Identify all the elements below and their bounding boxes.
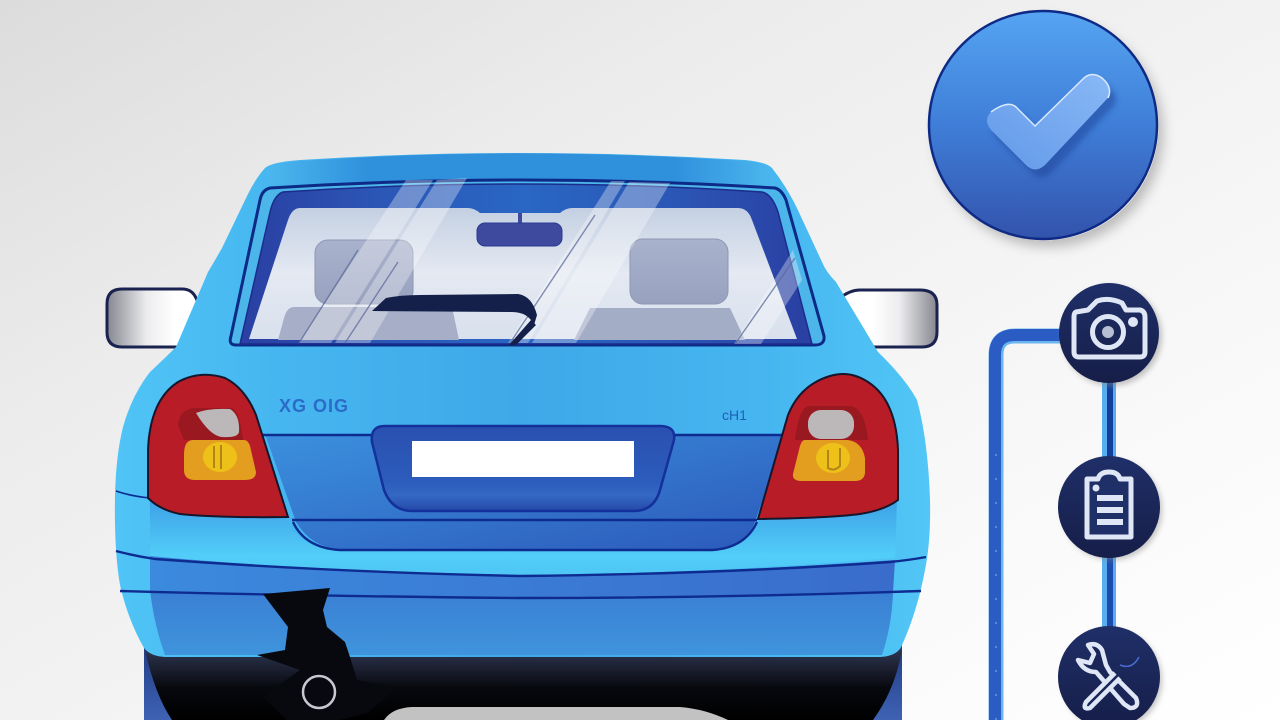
wiper [372,294,537,325]
icon: clipboard node [1058,456,1162,560]
mirror stem [518,213,522,224]
left tail light [148,375,288,517]
bumper lower panel [150,590,893,655]
check mark shadow [993,82,1116,178]
bumper crease lines [116,491,926,598]
car illustration [107,153,937,720]
check mark [987,74,1110,170]
check badge [929,11,1163,247]
trim label: cH1 [722,407,747,423]
lower bumper valance [144,640,902,720]
right seat back [574,308,745,340]
right tail light [758,374,898,519]
exhaust and damage shape [257,588,397,720]
process connector: left rail [995,335,1062,720]
reflection edge lines [299,215,795,344]
trunk lid [265,434,785,549]
left amber lamp [184,440,256,480]
left side mirror [107,289,220,347]
rear view mirror [477,223,562,246]
bumper band [150,556,895,598]
right amber lamp [793,440,865,481]
rear window [230,178,824,345]
right side mirror [830,290,937,347]
licence plate [412,441,634,477]
right headrest [630,239,728,304]
glass reflections [299,178,802,344]
trunk lines [263,435,785,520]
left reverse lamp [196,409,239,437]
car body shell [115,153,930,657]
roof panel shade [266,154,776,188]
exhaust pipe ring [303,676,335,708]
left headrest [315,240,413,304]
right reverse lamp [808,410,854,439]
licence plate recess [372,426,674,511]
left seat back [278,307,459,340]
process connector: vertical links [1102,380,1116,631]
icon: camera node [1059,283,1162,386]
icon: tools node [1058,626,1162,720]
brand badge: XG OIG [279,396,349,416]
rear bumper highlight [150,498,897,575]
